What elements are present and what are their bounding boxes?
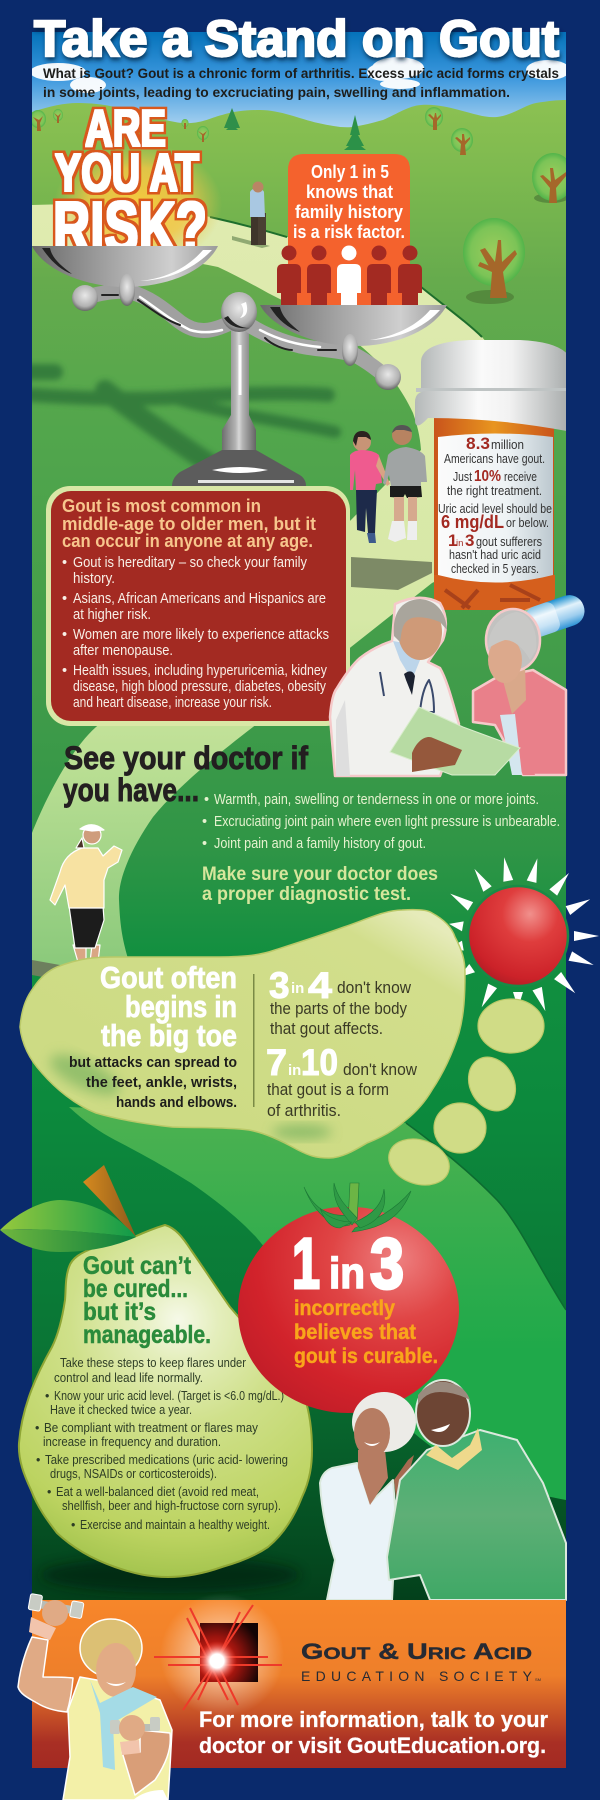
pear body text: Know your uric acid level. (Target is <6.0 mg/dL.) <box>54 1389 284 1403</box>
bottle body <box>434 415 554 610</box>
logo starburst <box>154 1593 284 1717</box>
woman with dumbbells <box>18 1594 172 1800</box>
big toe heading: the big toe <box>101 1018 237 1053</box>
star core <box>197 1641 237 1681</box>
lower dumbbell <box>110 1717 160 1734</box>
bottle text: or below. <box>506 516 549 530</box>
callout text: knows that <box>306 181 393 202</box>
callout: only 1 in 5 <box>277 154 422 305</box>
pear body text: Have it checked twice a year. <box>50 1403 192 1417</box>
winding path <box>32 204 484 965</box>
symptom bullets: Joint pain and a family history of gout. <box>214 836 426 852</box>
pear body text: Take these steps to keep flares under <box>60 1356 246 1370</box>
callout text <box>293 161 405 242</box>
scale stem and base <box>222 325 256 452</box>
pear heading: manageable. <box>83 1321 211 1349</box>
pear shadow <box>40 1557 300 1593</box>
callout text: is a risk factor. <box>293 221 405 242</box>
body <box>63 1677 172 1800</box>
road shadow <box>351 557 432 590</box>
diagnostic test note: a proper diagnostic test. <box>202 884 411 905</box>
logo wordmark <box>301 1639 541 1684</box>
tomato calyx <box>304 1183 411 1232</box>
scarf <box>90 1680 157 1770</box>
lower hand <box>119 1715 145 1741</box>
dark grey shadow near jogger <box>32 960 60 978</box>
prescription bottle <box>415 340 572 610</box>
footer call to action: For more information, talk to your <box>199 1707 548 1732</box>
panel bullets: • <box>62 555 67 571</box>
diagnostic test note: Make sure your doctor does <box>202 864 438 885</box>
panel bullets: • <box>62 627 67 643</box>
pear body text: • <box>35 1421 39 1435</box>
headline: are you at risk: RISK? <box>53 188 207 268</box>
bottle text: receive <box>504 470 537 484</box>
tomato stat: 1 <box>292 1225 320 1304</box>
intro text: in some joints, leading to excruciating pain, swelling and inflammation. <box>43 84 510 100</box>
panel bullets <box>62 555 329 711</box>
tomato stat: 3 <box>370 1225 404 1304</box>
heading: see your doctor: See your doctor if <box>64 740 308 776</box>
doctor <box>330 598 459 776</box>
stat: 3 in 4: the parts of the body <box>270 1000 408 1018</box>
callout text: family history <box>295 201 404 222</box>
panel bullets: Health issues, including hyperuricemia, kidney <box>73 663 328 679</box>
capsule pill <box>520 591 589 641</box>
ground <box>32 100 566 1600</box>
spread text: hands and elbows. <box>116 1094 237 1111</box>
diagnostic test note <box>202 864 438 905</box>
heading: see your doctor: you have... <box>63 772 199 808</box>
logo square <box>200 1623 258 1682</box>
bottle text: 8.3 <box>466 434 490 453</box>
raised dumbbell <box>28 1594 84 1619</box>
chart folder <box>390 707 520 775</box>
callout text: Only 1 in 5 <box>311 161 389 182</box>
title: Take a Stand on Gout <box>34 10 559 67</box>
pear heading: but it’s <box>83 1298 156 1326</box>
stat: 3 in 4: 4 <box>308 965 332 1006</box>
pear body text: drugs, NSAIDs or corticosteroids). <box>50 1467 217 1481</box>
clouds <box>30 57 570 93</box>
panel heading: can occur in anyone at any age. <box>62 530 313 551</box>
pear body text: Take prescribed medications (uric acid- lowering <box>45 1453 288 1467</box>
stat: 7 in 10: 10 <box>301 1042 338 1083</box>
couple walking <box>350 425 427 543</box>
scale shadow on grass <box>20 372 335 480</box>
pear panel <box>0 1165 312 1593</box>
foot shape <box>20 910 544 1193</box>
big toe heading: Gout often <box>100 960 237 995</box>
logo wordmark: G OUT & U RIC A CID <box>301 1639 532 1664</box>
bottle label <box>438 434 553 582</box>
divider <box>253 974 254 1107</box>
panel bullets: • <box>62 591 67 607</box>
bottle text: Americans have gout. <box>444 452 545 466</box>
stat: 3 in 4: don't know <box>337 979 411 997</box>
left pan <box>32 246 218 287</box>
pear body text: • <box>71 1518 75 1532</box>
pear body text: shellfish, beer and high-fructose corn syrup). <box>62 1499 281 1513</box>
symptom bullets: • <box>204 792 209 808</box>
stat: 3 in 4 <box>269 965 411 1038</box>
bottle text: checked in 5 years. <box>451 562 539 576</box>
panel border <box>46 486 350 726</box>
tomato <box>238 1183 459 1413</box>
panel fill <box>51 491 346 721</box>
lower wrist band <box>120 1740 140 1755</box>
panel bullets: Asians, African Americans and Hispanics are <box>73 591 326 607</box>
stat: 7 in 10: of arthritis. <box>267 1102 341 1120</box>
headline: are you at risk: ARE <box>85 100 166 158</box>
pear body text: control and lead life normally. <box>54 1371 203 1385</box>
yellow glow behind headline <box>54 143 222 267</box>
tomato text: believes that <box>294 1320 416 1344</box>
stat: 7 in 10: that gout is a form <box>267 1081 389 1099</box>
smiling couple photo <box>320 1380 566 1600</box>
footer band <box>32 1600 566 1768</box>
panel bullets: and heart disease, increase your risk. <box>73 695 272 711</box>
symptom bullets <box>202 792 560 852</box>
sun disc <box>468 886 568 986</box>
woman <box>350 431 390 543</box>
spread text: but attacks can spread to <box>69 1054 237 1071</box>
big toe heading <box>100 960 237 1053</box>
red risk panel <box>46 486 350 726</box>
panel bullets: • <box>62 663 67 679</box>
five people icons <box>277 246 422 305</box>
bottle text: million <box>491 438 524 452</box>
sky <box>32 32 566 132</box>
scale base <box>172 450 306 486</box>
bottle cap <box>415 340 572 432</box>
smile <box>106 1682 126 1686</box>
panel heading <box>62 495 316 551</box>
logo glow <box>160 1593 284 1717</box>
panel bullets: Women are more likely to experience attacks <box>73 627 329 643</box>
panel bullets: at higher risk. <box>73 607 151 623</box>
doctor hand <box>412 737 462 772</box>
tomato stat <box>292 1225 404 1304</box>
pear body text: • <box>45 1389 49 1403</box>
pear heading <box>83 1252 211 1349</box>
man standing on the path <box>232 182 270 248</box>
panel bullets: Gout is hereditary – so check your family <box>73 555 308 571</box>
toes <box>383 999 544 1193</box>
red sun with rays <box>448 856 599 1013</box>
big tree <box>463 218 525 304</box>
bottle text: hasn't had uric acid <box>449 548 541 562</box>
pear stem <box>83 1165 136 1237</box>
footer call to action <box>199 1707 548 1758</box>
bottle text: 1 <box>448 531 457 550</box>
pear body text: Be compliant with treatment or flares may <box>44 1421 259 1435</box>
stat: 7 in 10: 7 <box>266 1042 287 1083</box>
lower arm <box>122 1730 170 1795</box>
pear body text <box>35 1356 288 1532</box>
small band under the foot <box>69 1107 566 1500</box>
bottle text: 10% <box>474 468 501 485</box>
spread text <box>69 1054 237 1111</box>
doctor and patient photo <box>330 598 566 776</box>
headline: are you at risk <box>53 100 207 268</box>
bottle text: gout sufferers <box>476 535 542 549</box>
bottle text: in <box>456 538 463 549</box>
sun rays <box>448 856 599 1013</box>
face <box>96 1643 136 1697</box>
stat: 7 in 10 <box>266 1042 417 1120</box>
tomato text <box>294 1296 438 1368</box>
pear body <box>19 1225 312 1577</box>
big toe heading: begins in <box>125 989 237 1024</box>
woman <box>320 1392 416 1600</box>
symptom bullets: Warmth, pain, swelling or tenderness in one or more joints. <box>214 792 539 808</box>
orange box <box>288 154 410 305</box>
stat: 3 in 4: that gout affects. <box>270 1020 383 1038</box>
hair <box>80 1619 142 1677</box>
right pan <box>260 305 447 346</box>
soft shading <box>45 1046 125 1104</box>
tomato text: incorrectly <box>294 1296 395 1320</box>
headline: are you at risk: YOU AT <box>55 143 199 203</box>
balance scale <box>32 246 447 486</box>
raised arm <box>18 1637 73 1712</box>
tomato body <box>238 1207 459 1413</box>
logo wordmark: SM <box>535 1677 541 1682</box>
intro text <box>43 65 559 100</box>
pear heading: Gout can’t <box>83 1252 192 1280</box>
stat: 3 in 4: in <box>291 980 304 997</box>
man <box>387 1380 566 1600</box>
bottle text: Uric acid level should be <box>438 502 552 516</box>
tomato stat: in <box>329 1249 365 1298</box>
heading: see your doctor <box>63 740 308 808</box>
pear body text: Eat a well-balanced diet (avoid red meat, <box>56 1485 259 1499</box>
tomato text: gout is curable. <box>294 1344 438 1368</box>
spread text: the feet, ankle, wrists, <box>86 1074 237 1091</box>
pear body text: increase in frequency and duration. <box>43 1435 221 1449</box>
pear heading: be cured... <box>83 1275 188 1303</box>
right tree <box>532 153 566 203</box>
logo wordmark: EDUCATION SOCIETY <box>301 1668 533 1684</box>
small trees <box>30 107 473 152</box>
symptom bullets: • <box>202 836 207 852</box>
bottle text: Just <box>453 470 472 484</box>
star lines <box>154 1605 282 1710</box>
raised hand <box>42 1600 68 1626</box>
stat: 7 in 10: don't know <box>343 1061 417 1079</box>
woman jogging <box>50 825 122 962</box>
path edge lines <box>210 217 482 337</box>
stat: 3 in 4: 3 <box>269 965 290 1006</box>
patient <box>473 609 566 775</box>
pear body text: • <box>47 1485 51 1499</box>
collars and knobs <box>119 274 135 306</box>
beam <box>86 291 388 378</box>
bottle text: 3 <box>465 531 474 550</box>
band edge <box>406 1123 566 1310</box>
foot sole <box>20 910 465 1158</box>
panel heading: Gout is most common in <box>62 495 261 516</box>
bottle text: the right treatment. <box>447 484 542 498</box>
panel bullets: disease, high blood pressure, diabetes, obesity <box>73 679 327 695</box>
wrist band <box>29 1617 56 1640</box>
trees <box>30 107 574 304</box>
pear leaf <box>0 1200 136 1252</box>
intro text: What is Gout? Gout is a chronic form of arthritis. Excess uric acid forms crystals <box>43 65 559 81</box>
panel bullets: history. <box>73 571 115 587</box>
symptom bullets: • <box>202 814 207 830</box>
pine trees <box>224 108 240 130</box>
footer call to action: doctor or visit GoutEducation.org. <box>199 1733 546 1758</box>
bottle text <box>438 434 552 576</box>
pear body text: • <box>36 1453 40 1467</box>
bottle text: 6 mg/dL <box>441 512 504 532</box>
man <box>383 425 427 542</box>
stat: 7 in 10: in <box>288 1062 301 1079</box>
panel bullets: after menopause. <box>73 643 173 659</box>
pear body text: Exercise and maintain a healthy weight. <box>80 1518 270 1532</box>
panel heading: middle-age to older men, but it <box>62 513 316 534</box>
white pants <box>133 1790 168 1800</box>
